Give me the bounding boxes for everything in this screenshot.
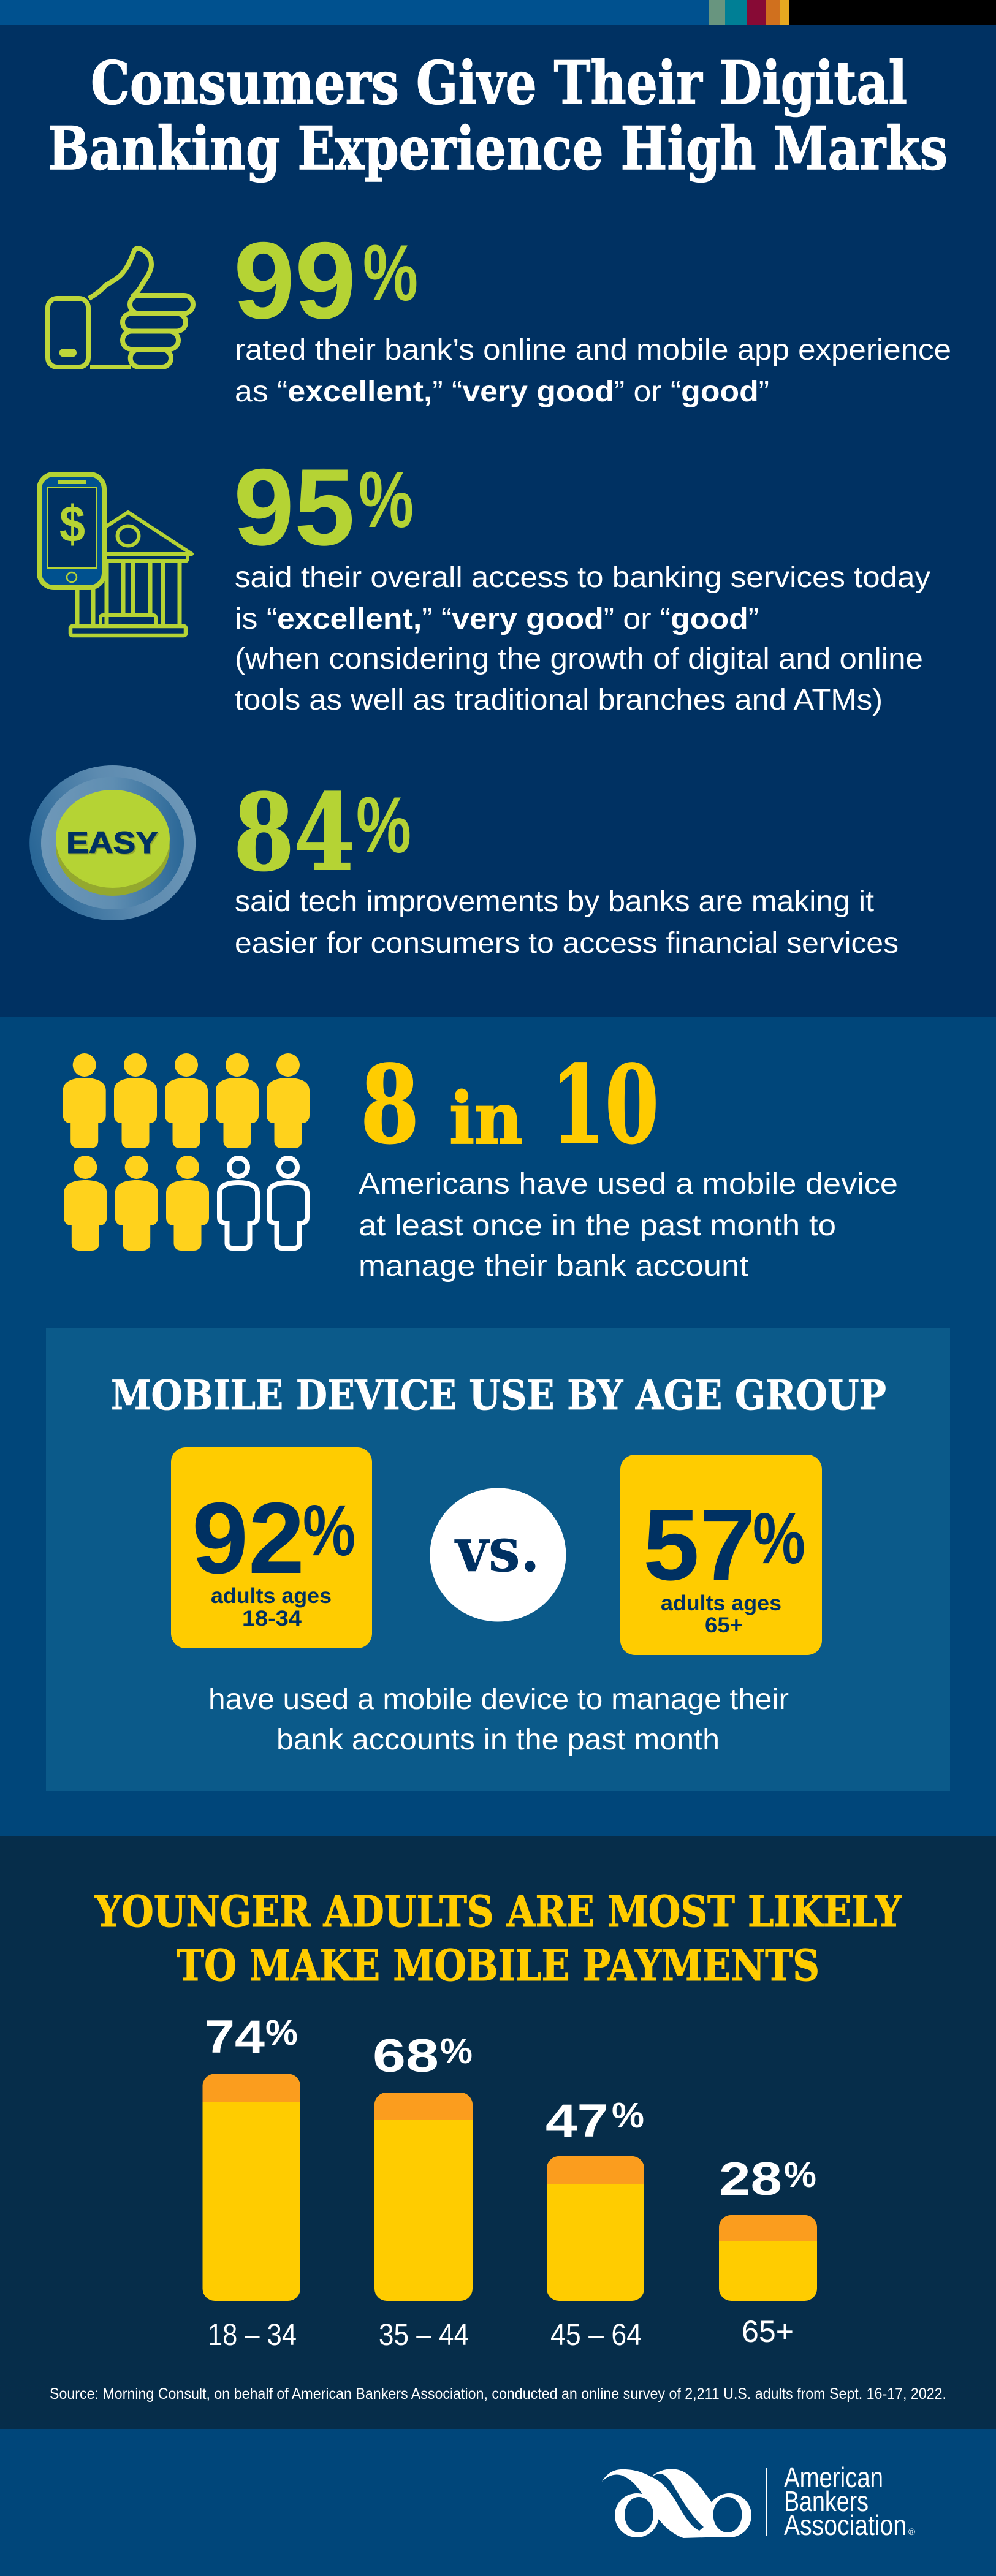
icon: easy button — [29, 765, 196, 920]
card: adults ages 65+: % — [753, 1498, 805, 1579]
badge: vs: vs. — [454, 1513, 540, 1586]
text: age group caption — [208, 1683, 789, 1756]
panel: digital banking ratings — [0, 25, 996, 1017]
logo: American Bankers Association — [602, 2461, 915, 2541]
source note: Source: Morning Consult, on behalf of American Bankers Association, conducted an online survey of 2,211 U.S. adults from Sept. 16-17, 2022. — [50, 2385, 946, 2403]
icon: mobile phone: $ — [59, 495, 85, 553]
card: adults ages 18-34: % — [303, 1490, 355, 1571]
bar: 35-44, 68 percent: 68 — [373, 2030, 439, 2082]
title — [48, 48, 948, 183]
text: 8 in 10 description: Americans have used a mobile device — [359, 1168, 898, 1200]
logo mark — [602, 2469, 751, 2538]
bar: 18-34, 74 percent: % — [265, 2013, 298, 2053]
bar: 35-44, 68 percent: % — [440, 2031, 473, 2071]
stat: 84 percent: % — [356, 780, 411, 869]
bar: 18-34, 74 percent: 74 — [205, 2011, 265, 2063]
icon: mobile phone — [39, 474, 104, 588]
bar: 18-34, 74 percent: 18 – 34 — [208, 2317, 297, 2352]
text: 95 percent description: said their overall access to banking services today — [235, 561, 930, 594]
card: adults ages 18-34 — [171, 1447, 372, 1648]
bar: 65+, 28 percent: % — [784, 2155, 816, 2195]
text: 84 percent description — [235, 885, 899, 960]
icon: easy button: EASY — [67, 827, 159, 861]
bar: 45-64, 47 percent: 45 – 64 — [550, 2317, 642, 2352]
bar: 65+, 28 percent — [719, 2153, 817, 2349]
text: 8 in 10 description — [359, 1168, 898, 1282]
card: adults ages 65+: adults ages — [661, 1591, 781, 1615]
stat: 95 percent: 95 — [234, 446, 355, 568]
bar: 65+, 28 percent: 65+ — [742, 2314, 794, 2349]
card: adults ages 18-34: 92 — [192, 1482, 305, 1594]
bar chart: mobile payments by age — [202, 2011, 817, 2352]
text: 95 percent description: (when considering the growth of digital and online — [235, 643, 923, 675]
logo wordmark — [784, 2461, 915, 2541]
heading: younger adults: TO MAKE MOBILE PAYMENTS — [177, 1940, 819, 1991]
text: 8 in 10 description: manage their bank account — [359, 1250, 748, 1282]
text: 84 percent description: easier for consumers to access financial services — [235, 927, 899, 960]
stat: 95 percent — [234, 446, 414, 568]
text: age group caption: have used a mobile device to manage their — [208, 1683, 789, 1716]
text: 99 percent description — [235, 334, 951, 408]
text: 84 percent description: said tech improvements by banks are making it — [235, 885, 874, 918]
text: 8 in 10 description: at least once in the past month to — [359, 1210, 836, 1242]
text: 95 percent description: tools as well as traditional branches and ATMs) — [235, 684, 883, 716]
heading: younger adults — [94, 1886, 902, 1991]
text: 95 percent description: is “excellent, ” “very good ” or “good” — [235, 603, 759, 635]
logo divider — [766, 2468, 767, 2536]
stat: 99 percent: % — [363, 228, 418, 317]
panel: mobile device use by age group — [46, 1328, 950, 1791]
stat: 8 in 10: 10 — [551, 1042, 659, 1168]
bar: 45-64, 47 percent: % — [612, 2096, 644, 2135]
card: adults ages 65+: 57 — [643, 1488, 756, 1601]
heading: mobile device use by age group: MOBILE DEVICE USE BY AGE GROUP — [111, 1371, 886, 1419]
top colour strip — [0, 0, 996, 25]
logo wordmark: Bankers — [784, 2485, 869, 2517]
card: adults ages 65+: 65+ — [705, 1613, 743, 1637]
panel: mobile device use — [0, 1017, 996, 1836]
bar: 35-44, 68 percent: 35 – 44 — [379, 2317, 469, 2352]
logo wordmark: Association — [784, 2509, 907, 2541]
icon: mobile phone and bank — [39, 474, 192, 635]
bar: 18-34, 74 percent — [202, 2011, 300, 2352]
bar: 45-64, 47 percent — [546, 2095, 644, 2352]
badge: vs — [430, 1488, 566, 1621]
text: 99 percent description: rated their bank’s online and mobile app experience — [235, 334, 951, 366]
stat: 8 in 10: 8 — [360, 1042, 419, 1168]
stat: 99 percent: 99 — [234, 219, 356, 341]
stat: 99 percent — [234, 219, 418, 341]
text: 99 percent description: as “excellent, ” “very good ” or “good” — [235, 376, 769, 408]
stat: 8 in 10: in — [449, 1077, 523, 1161]
text: age group caption: bank accounts in the past month — [276, 1724, 720, 1756]
card: adults ages 18-34: adults ages — [211, 1584, 332, 1608]
card: adults ages 65+ — [620, 1455, 822, 1655]
icon: easy button: EASY — [66, 825, 158, 860]
bar: 65+, 28 percent: 28 — [719, 2153, 782, 2205]
icon: people, 8 of 10 filled — [63, 1053, 310, 1251]
logo wordmark: American — [784, 2461, 883, 2493]
icon: thumbs up — [48, 248, 193, 367]
stat: 95 percent: % — [359, 455, 414, 544]
text: 95 percent description — [235, 561, 930, 716]
icon: bank building — [70, 512, 192, 635]
stat: 8 in 10 — [360, 1042, 659, 1168]
bar: 45-64, 47 percent: 47 — [546, 2095, 609, 2147]
stat: 84 percent: 84 — [234, 770, 355, 895]
panel: mobile payments — [0, 1836, 996, 2429]
panel: footer — [0, 2429, 996, 2576]
card: adults ages 18-34: 18-34 — [242, 1607, 302, 1631]
bar: 35-44, 68 percent — [373, 2030, 473, 2352]
logo wordmark: ® — [908, 2527, 915, 2537]
